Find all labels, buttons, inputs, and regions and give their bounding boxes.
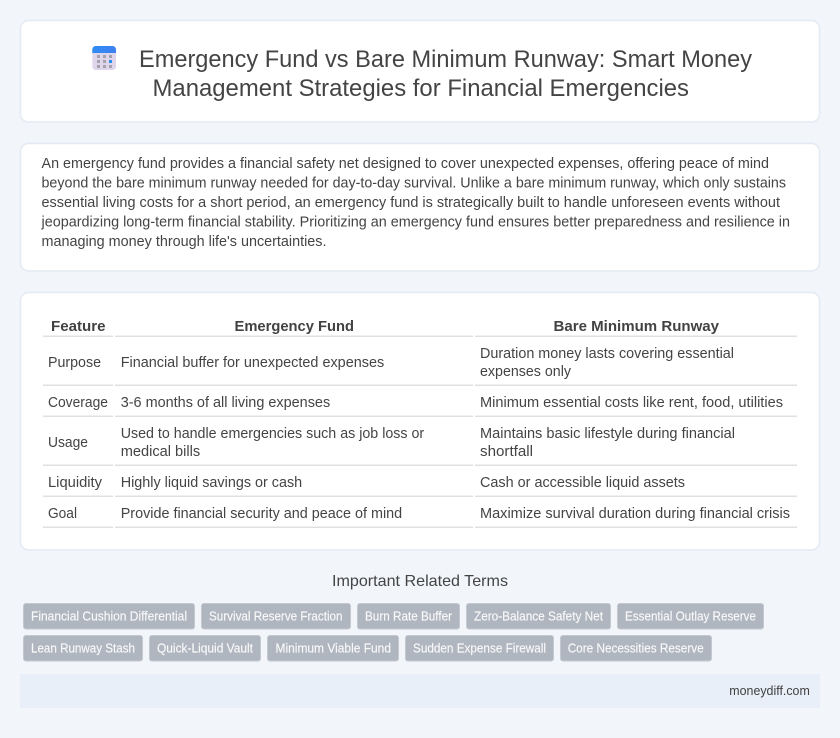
title: [139, 46, 753, 102]
row: usage: medical bills: [121, 444, 200, 460]
row: goal: Maximize survival duration during financial crisis: [480, 506, 790, 522]
panel: introduction text: beyond the bare minimum runway needed for day-to-day survival. Unlike a bare minimum runway, which only sustains: [42, 176, 786, 192]
row: coverage: 3-6 months of all living expenses: [121, 395, 330, 411]
icon: calendar: [92, 46, 116, 70]
row: liquidity: Cash or accessible liquid assets: [480, 475, 685, 491]
related term tags: Minimum Viable Fund: [276, 641, 391, 655]
related term tags: Zero-Balance Safety Net: [474, 609, 603, 623]
panel: introduction text: An emergency fund provides a financial safety net designed to cover unexpected expenses, offering peace of mind: [42, 156, 769, 172]
row: coverage: Coverage: [48, 395, 108, 411]
panel: introduction text: jeopardizing long-term financial stability. Prioritizing an emergency fund ensures better preparedness and resilience in: [41, 214, 790, 230]
row: liquidity: [48, 475, 685, 491]
related term tags: Sudden Expense Firewall: [413, 641, 546, 655]
row: purpose: expenses only: [480, 364, 572, 380]
related term tags: [24, 604, 764, 661]
row: usage: Used to handle emergencies such as job loss or: [121, 426, 424, 442]
footer: moneydiff.com: [729, 684, 810, 698]
table header row: Bare Minimum Runway: [554, 318, 720, 335]
row: goal: [48, 506, 790, 522]
table header row: [51, 318, 720, 335]
heading: important related terms: Important Related Terms: [332, 573, 508, 590]
related term tags: Quick-Liquid Vault: [157, 641, 253, 655]
title: Management Strategies for Financial Emergencies: [152, 75, 689, 102]
related term tags: Essential Outlay Reserve: [625, 609, 756, 623]
panel: introduction text: [20, 144, 820, 271]
related term tags: Lean Runway Stash: [31, 641, 135, 655]
row: usage: shortfall: [480, 444, 533, 460]
row: coverage: [48, 395, 783, 411]
related term tags: Burn Rate Buffer: [365, 609, 453, 623]
footer: [20, 674, 820, 708]
row: liquidity: Highly liquid savings or cash: [121, 475, 302, 491]
panel: introduction text: essential living costs for a short period, an emergency fund is strategically built to handle unforeseen events without: [42, 195, 780, 211]
row: usage: Usage: [48, 435, 88, 451]
panel: header: [20, 20, 820, 122]
row: usage: Maintains basic lifestyle during financial: [480, 426, 735, 442]
related term tags: Survival Reserve Fraction: [209, 609, 342, 623]
panel: introduction text: managing money through life's uncertainties.: [42, 234, 326, 250]
related term tags: Core Necessities Reserve: [568, 641, 704, 655]
row: purpose: [48, 346, 734, 380]
table header row: Emergency Fund: [234, 318, 354, 335]
row: purpose: Duration money lasts covering essential: [480, 346, 734, 362]
title: Emergency Fund vs Bare Minimum Runway: Smart Money: [139, 46, 753, 73]
row: goal: Provide financial security and peace of mind: [121, 506, 402, 522]
row: purpose: Financial buffer for unexpected expenses: [121, 355, 384, 371]
table header row: Feature: [51, 318, 106, 335]
panel: comparison table: [20, 292, 820, 550]
row: usage: [48, 426, 735, 460]
row: goal: Goal: [48, 506, 77, 522]
row: coverage: Minimum essential costs like rent, food, utilities: [480, 395, 783, 411]
row: liquidity: Liquidity: [48, 475, 103, 491]
related term tags: Financial Cushion Differential: [31, 609, 187, 623]
row: purpose: Purpose: [48, 355, 101, 371]
